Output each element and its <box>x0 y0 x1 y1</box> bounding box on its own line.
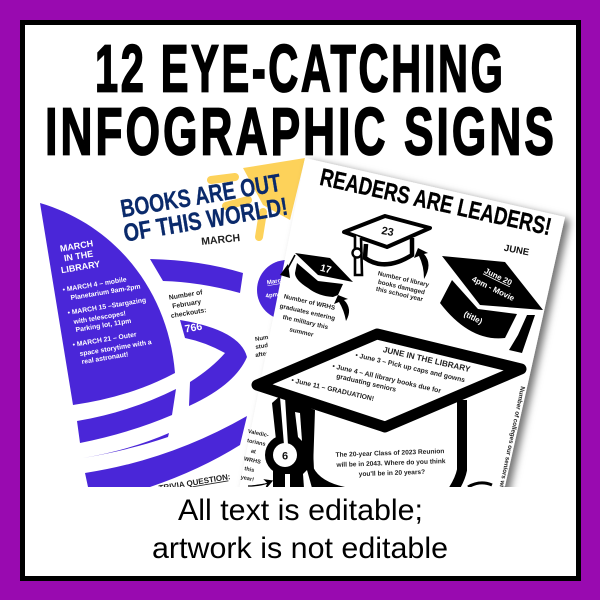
reunion text: The 20-year Class of 2023 Reunion <box>335 448 444 459</box>
partial text behind second poster: stud <box>255 343 269 351</box>
february checkouts stat <box>168 289 207 335</box>
sample posters <box>40 158 565 499</box>
footer note: artwork is not editable <box>152 532 448 565</box>
small arrow <box>248 480 272 488</box>
big cap with tassel <box>257 334 521 499</box>
reunion text: you'll be in 20 years? <box>359 469 425 478</box>
june in the library list: • June 11 – GRADUATION! <box>291 377 375 403</box>
cap: june 20 movie: June 20 <box>483 266 514 288</box>
damaged books caption: this school year <box>375 286 424 303</box>
partial text behind second poster: Num <box>255 335 269 343</box>
march in the library text: real astronaut! <box>81 351 129 366</box>
arrow to cap 23 <box>414 248 428 279</box>
poster heading: BOOKS ARE OUT <box>118 169 283 223</box>
partial text behind second poster <box>255 278 282 357</box>
footer note <box>152 494 448 565</box>
june in the library list: • June 4 – All library books due for <box>332 363 442 395</box>
arrow to cap 17 <box>334 295 349 321</box>
poster heading <box>120 174 287 241</box>
valedictorians caption <box>240 429 269 483</box>
footer note: All text is editable; <box>178 494 423 527</box>
valedictorians caption: at <box>250 449 256 456</box>
military caption: graduates entering <box>279 303 336 322</box>
march in the library text: space storytime with a <box>79 339 152 358</box>
reunion text: will be in 2043. Where do you think <box>335 458 446 469</box>
march in the library text: Planetarium 9am-2pm <box>70 283 141 302</box>
valedictorians caption: torians <box>246 438 266 448</box>
cap: 17 military graduates <box>280 253 353 297</box>
tassel <box>265 396 318 488</box>
june in the library list: graduating seniors <box>336 373 397 394</box>
cap body <box>309 400 467 487</box>
title: INFOGRAPHIC SIGNS <box>45 95 554 170</box>
partial text behind second poster: after <box>255 351 269 359</box>
valedictorians caption: Valedic- <box>247 429 269 439</box>
march in the library text: • MARCH 21 – Outer <box>72 331 137 349</box>
cap: june 20 movie: 4pm - Movie <box>470 275 516 303</box>
title: 12 EYE-CATCHING <box>95 31 503 106</box>
march in the library text: with telescopes! <box>72 310 126 326</box>
poster heading: OF THIS WORLD! <box>122 193 290 248</box>
march in the library text: • MARCH 4 – mobile <box>62 276 127 294</box>
military caption: summer <box>289 326 315 339</box>
month label: JUNE <box>503 243 530 258</box>
damaged books caption: Number of library <box>377 270 430 289</box>
march in the library text <box>59 238 152 366</box>
february checkouts stat: 766 <box>184 321 203 335</box>
partial text behind second poster: March <box>267 278 285 286</box>
march in the library text: • MARCH 15 –Stargazing <box>67 297 147 317</box>
march in the library text: Parking lot, 11pm <box>75 318 132 334</box>
mortarboard <box>257 334 521 427</box>
reunion text <box>335 448 446 478</box>
month label: MARCH <box>201 232 241 248</box>
march in the library text: IN THE <box>63 249 94 263</box>
military caption: the military this <box>282 314 329 331</box>
blue planet shapes <box>40 203 285 487</box>
cap: 17 military graduates: 17 <box>319 263 333 276</box>
poster sheet <box>238 158 565 495</box>
cap: june 20 movie: (title) <box>462 309 484 326</box>
june in the library list: • June 3 – Pick up caps and gowns <box>355 352 466 384</box>
june in the library list: JUNE IN THE LIBRARY <box>382 345 472 374</box>
march in the library text: MARCH <box>59 238 94 254</box>
partial text behind second poster: 4pm <box>265 292 278 300</box>
cap: 23 damaged books: 23 <box>380 225 395 239</box>
cap: 23 damaged books <box>344 216 430 275</box>
damaged books caption: books damaged <box>377 279 426 296</box>
poster: books are out of this world <box>40 158 320 493</box>
february checkouts stat: checkouts: <box>170 307 207 320</box>
february checkouts stat: February <box>172 299 202 310</box>
february checkouts stat: Number of <box>168 289 204 302</box>
poster: readers are leaders <box>238 158 565 499</box>
cap: june 20 movie <box>440 256 543 353</box>
military caption: Number of WRHS <box>283 293 336 312</box>
valedictorians caption: year! <box>240 475 255 483</box>
march in the library text: LIBRARY <box>60 259 101 275</box>
military caption <box>279 293 336 339</box>
yellow sun <box>211 158 305 237</box>
damaged books caption <box>376 271 430 302</box>
valedictorians caption: WRHS <box>243 456 261 466</box>
june in the library list <box>291 345 472 403</box>
trivia question: TRIVIA QUESTION: <box>158 472 231 493</box>
poster sheet <box>40 158 320 487</box>
title <box>45 31 554 170</box>
valedictorians caption: this <box>244 466 255 474</box>
big cap with tassel: 6 <box>282 450 288 462</box>
tassel knob <box>273 443 297 467</box>
vertical colleges caption: Number of colleges our seniors will <box>497 386 526 491</box>
small arrow lower right <box>468 483 492 487</box>
